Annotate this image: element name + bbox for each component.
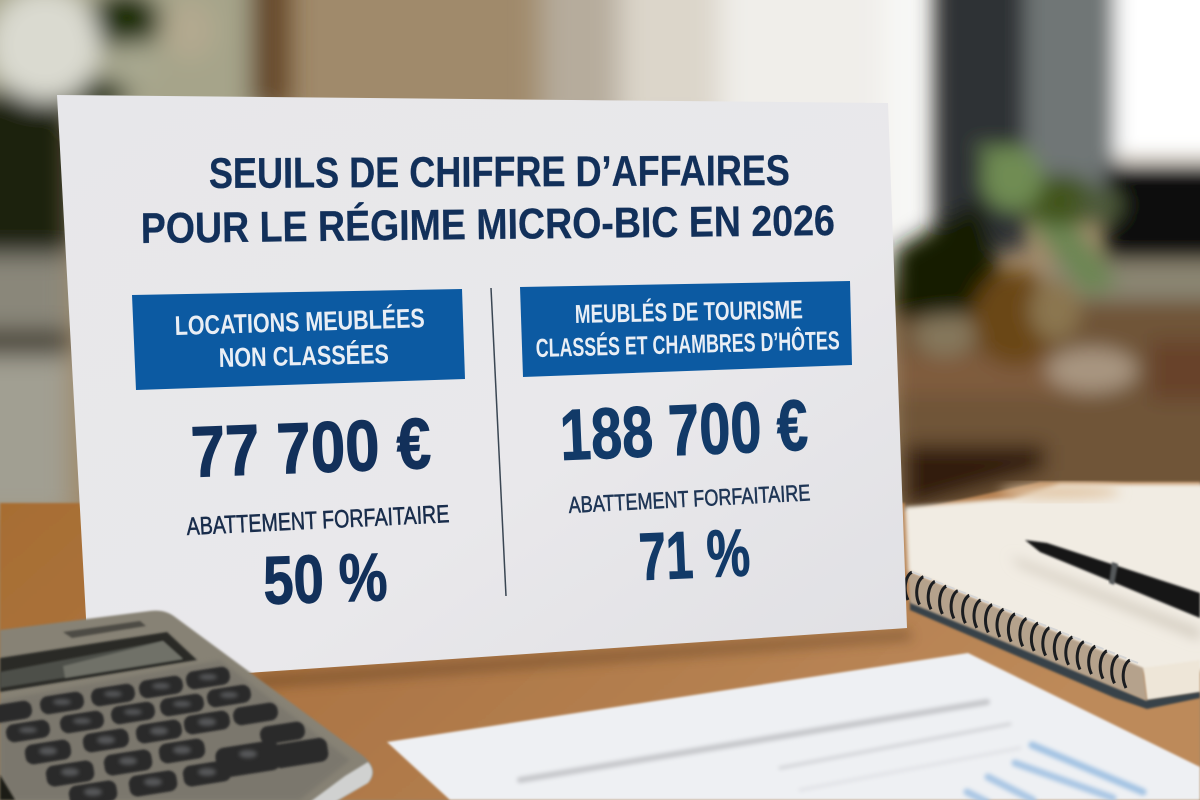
- label: abattement: ABATTEMENT FORFAITAIRE: [568, 479, 811, 518]
- notebook page edge: [1143, 660, 1200, 701]
- solar panel: [63, 621, 146, 638]
- banner: right: CLASSÉS ET CHAMBRES D’HÔTES: [535, 325, 840, 363]
- key highlights: [19, 674, 257, 796]
- notebook with pen: [905, 484, 1200, 709]
- wooden desk: [0, 482, 1200, 800]
- keys: [0, 666, 330, 800]
- notebook cover: [910, 600, 1200, 709]
- document with chart: [387, 653, 1200, 800]
- display: [0, 632, 197, 692]
- title: [141, 147, 835, 253]
- white card: [57, 95, 907, 690]
- panel: meublés de tourisme classés: [520, 281, 852, 595]
- panel: locations meublées non classées: [132, 289, 465, 619]
- column divider: [491, 288, 506, 596]
- banner: right: [520, 281, 852, 377]
- value: 50 %: 50 %: [262, 539, 388, 619]
- pen: [1010, 540, 1200, 640]
- spiral binding: [905, 572, 1147, 701]
- banner: left: NON CLASSÉES: [218, 338, 389, 373]
- title: POUR LE RÉGIME MICRO-BIC EN 2026: [141, 197, 835, 253]
- value: 71 %: 71 %: [637, 515, 752, 595]
- blurred room background: [0, 0, 1200, 520]
- banner: right: MEUBLÉS DE TOURISME: [574, 294, 803, 329]
- banner: left: LOCATIONS MEUBLÉES: [174, 302, 425, 341]
- calculator: [0, 611, 373, 800]
- title: SEUILS DE CHIFFRE D’AFFAIRES: [209, 147, 790, 198]
- card shadow: [250, 630, 912, 688]
- label: abattement: ABATTEMENT FORFAITAIRE: [186, 500, 450, 541]
- banner: left: [132, 289, 465, 390]
- value: 77 700 €: 77 700 €: [190, 404, 432, 493]
- value: 188 700 €: 188 700 €: [558, 386, 809, 476]
